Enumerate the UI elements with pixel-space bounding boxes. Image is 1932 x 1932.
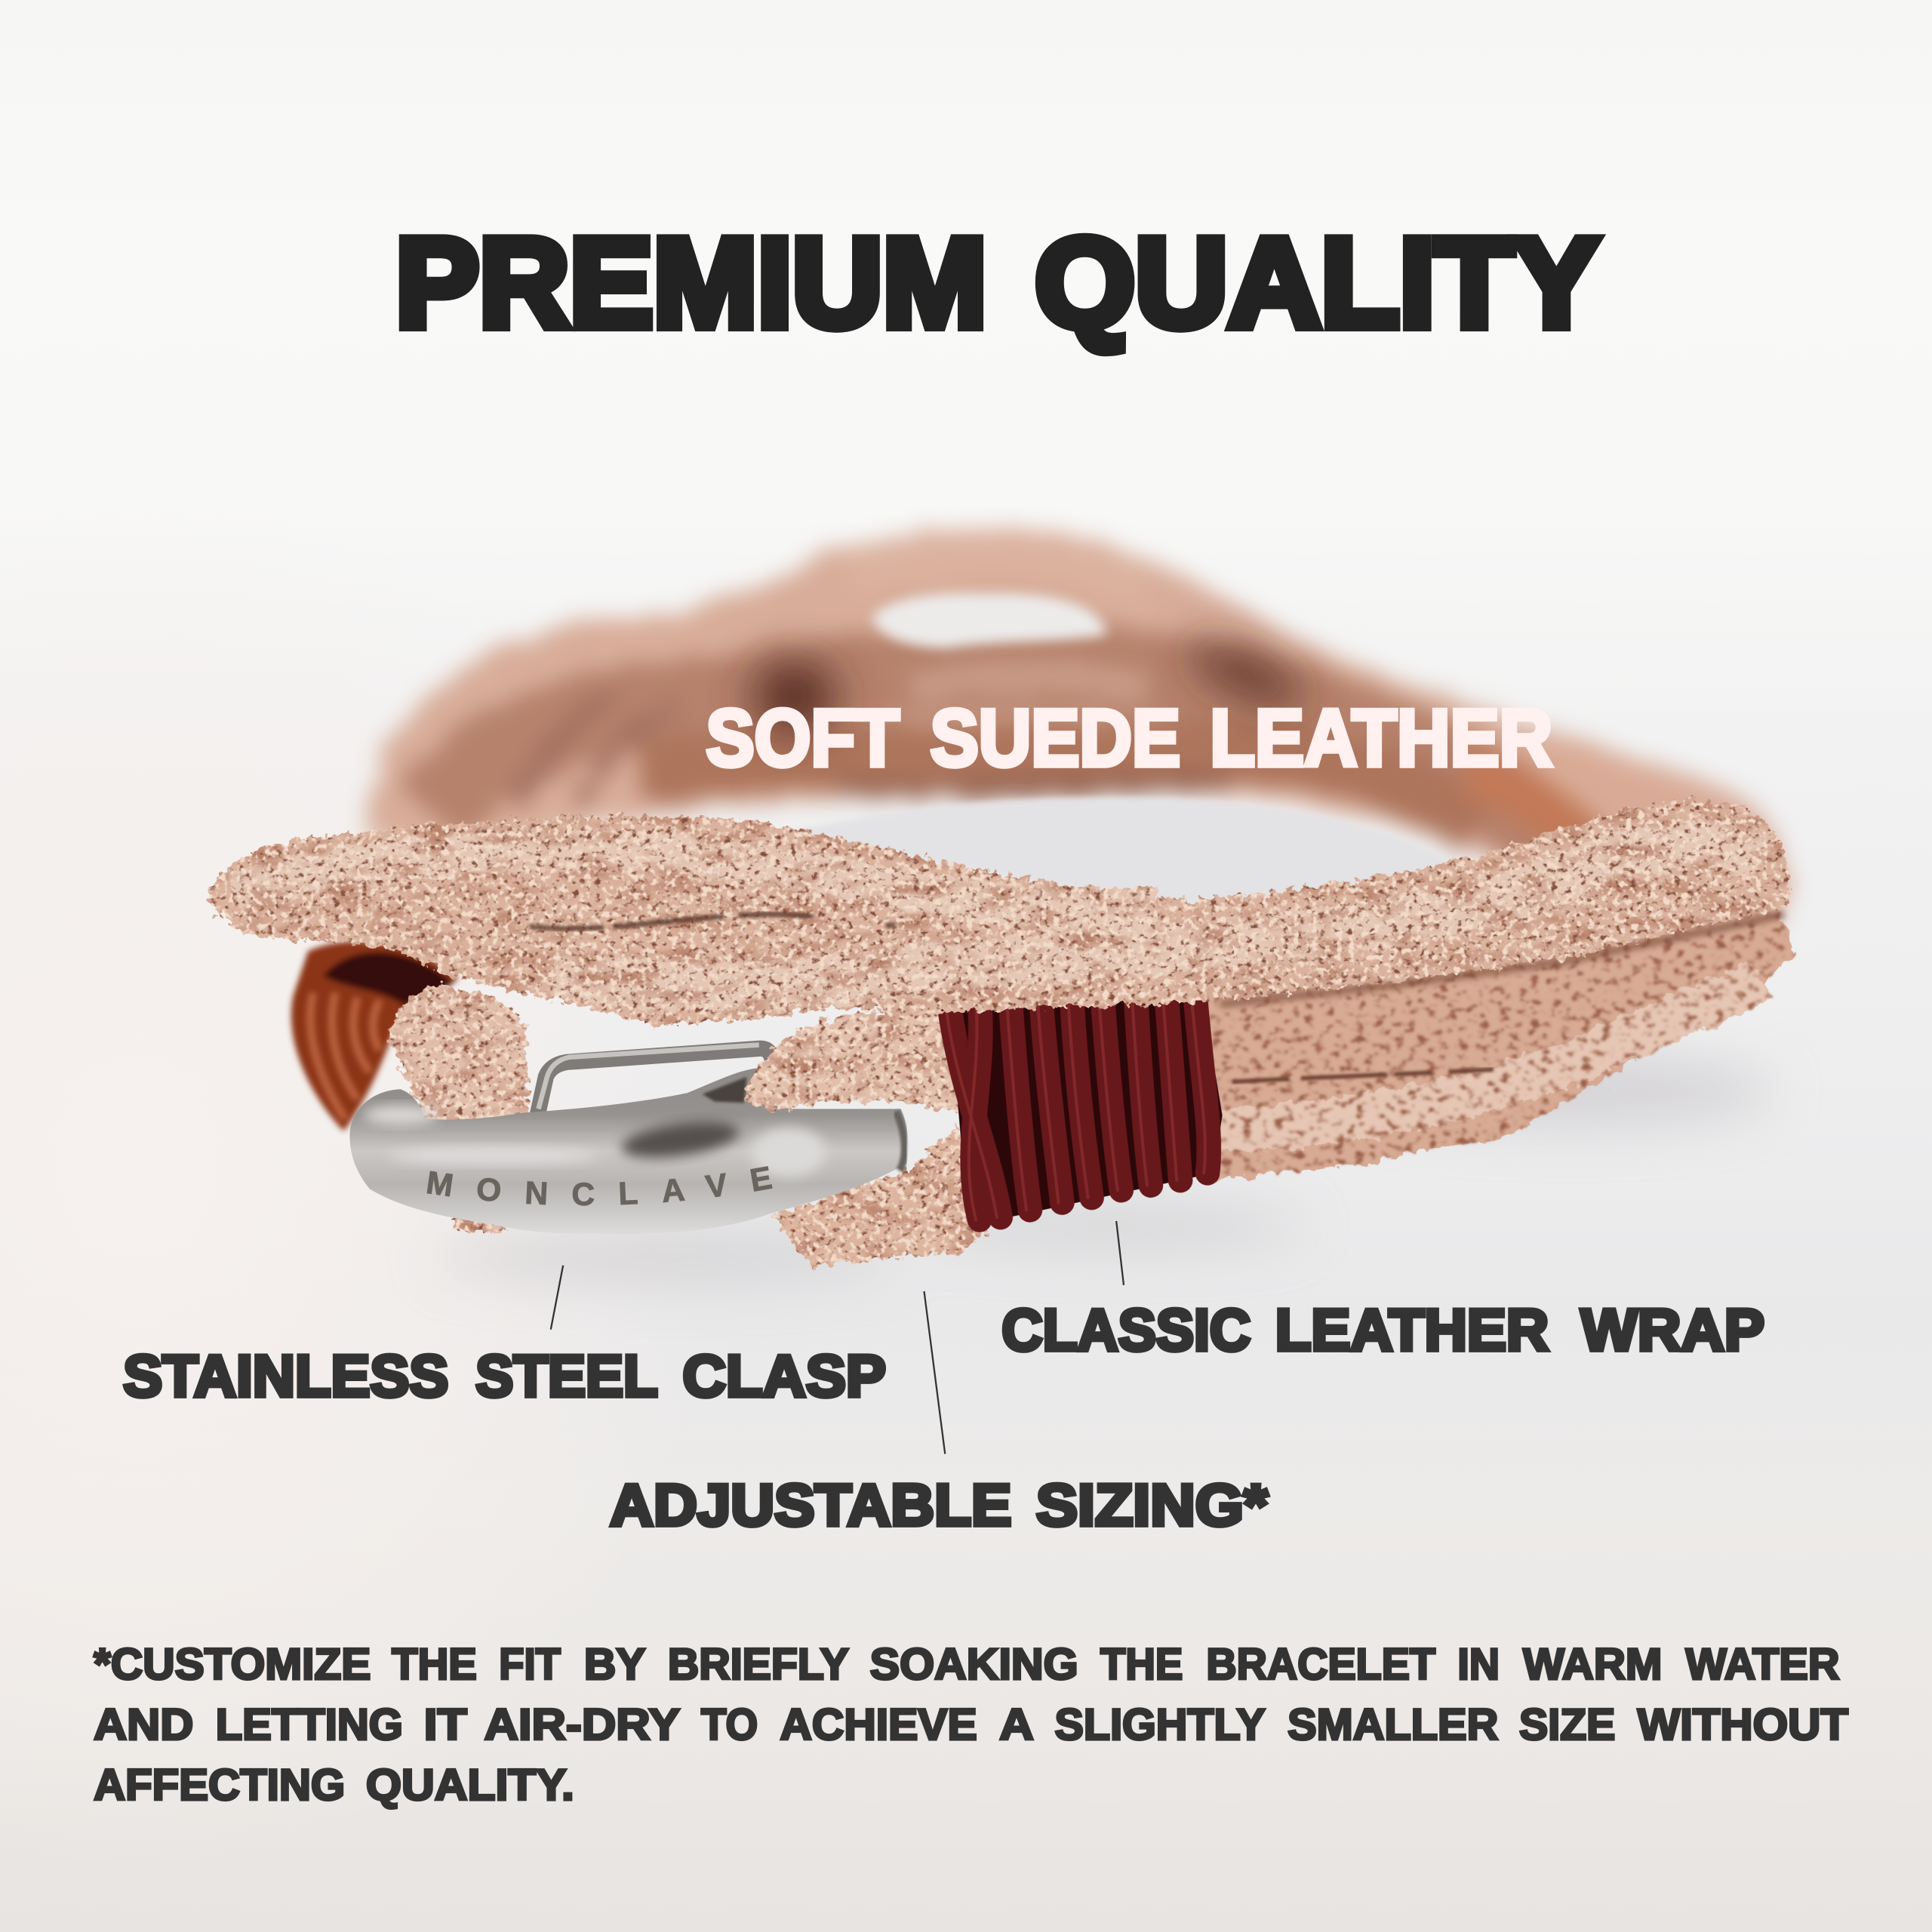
dark leather wrap <box>941 995 1223 1223</box>
footnote: BRACELET <box>1206 1640 1435 1689</box>
leader line: steel clasp <box>551 1266 563 1330</box>
lower hook strand <box>771 1128 988 1266</box>
label: stainless steel clasp: CLASP <box>682 1343 886 1409</box>
label: classic leather wrap: LEATHER <box>1275 1297 1549 1363</box>
footnote: IT <box>424 1700 467 1749</box>
back strands (out of focus) <box>365 529 1786 961</box>
footnote: LETTING <box>216 1700 403 1749</box>
clasp loop <box>537 1044 773 1116</box>
left leather wrap (blurred) <box>291 941 458 1131</box>
footnote: SOAKING <box>870 1640 1078 1689</box>
label: adjustable sizing: ADJUSTABLE <box>610 1472 1011 1538</box>
footnote: AIR-DRY <box>485 1700 680 1749</box>
label: classic leather wrap: CLASSIC <box>1001 1297 1251 1363</box>
footnote: SLIGHTLY <box>1055 1700 1266 1749</box>
title <box>395 212 1599 354</box>
footnote <box>94 1640 1848 1810</box>
label: soft suede leather: SOFT <box>706 693 900 783</box>
title: PREMIUM <box>395 212 987 354</box>
footnote: QUALITY. <box>366 1761 574 1810</box>
dark hollows in back strands <box>753 633 1604 952</box>
footnote: SIZE <box>1519 1700 1615 1749</box>
label: adjustable sizing: SIZING* <box>1036 1472 1269 1538</box>
left strand end <box>388 986 530 1232</box>
footnote: WATER <box>1685 1640 1840 1689</box>
seam between lower strands <box>1232 1069 1494 1081</box>
shadow under main strand <box>1220 914 1784 1004</box>
footnote: SMALLER <box>1287 1700 1498 1749</box>
footnote: WITHOUT <box>1638 1700 1848 1749</box>
footnote: THE <box>392 1640 477 1689</box>
label: stainless steel clasp <box>123 1343 886 1409</box>
footnote: BRIEFLY <box>668 1640 849 1689</box>
label: soft suede leather <box>706 693 1552 783</box>
front suede strands <box>207 801 1790 1025</box>
label: stainless steel clasp: STEEL <box>475 1343 658 1409</box>
lower right strands <box>1201 888 1794 1180</box>
engraved brand name: MONCLAVE <box>427 1166 773 1206</box>
steel clasp body <box>350 1038 939 1233</box>
gap in back strands <box>872 593 1106 648</box>
leader line: leather wrap <box>1116 1221 1124 1285</box>
footnote: AND <box>94 1700 193 1749</box>
label: classic leather wrap: WRAP <box>1581 1297 1764 1363</box>
background tint <box>0 493 727 1873</box>
label: stainless steel clasp: STAINLESS <box>123 1343 448 1409</box>
label: soft suede leather: LEATHER <box>1210 693 1552 783</box>
label: adjustable sizing <box>610 1472 1269 1538</box>
label: soft suede leather: SUEDE <box>931 693 1180 783</box>
label: classic leather wrap <box>1001 1297 1764 1363</box>
footnote: ACHIEVE <box>780 1700 977 1749</box>
title: QUALITY <box>1035 212 1599 354</box>
footnote: TO <box>701 1700 758 1749</box>
inner opening of bracelet <box>764 798 1466 906</box>
footnote: THE <box>1100 1640 1183 1689</box>
footnote: WARM <box>1523 1640 1662 1689</box>
upper hook strand <box>744 1011 964 1115</box>
footnote: AFFECTING <box>94 1761 345 1810</box>
footnote: BY <box>584 1640 646 1689</box>
leader line: adjustable sizing <box>924 1291 945 1454</box>
footnote: FIT <box>499 1640 561 1689</box>
footnote: A <box>999 1700 1034 1749</box>
bracelet photo <box>205 514 1804 1292</box>
contact shadow <box>431 1056 1774 1279</box>
footnote: *CUSTOMIZE <box>94 1640 371 1689</box>
strand seam shadow <box>530 914 900 928</box>
footnote: IN <box>1457 1640 1500 1689</box>
